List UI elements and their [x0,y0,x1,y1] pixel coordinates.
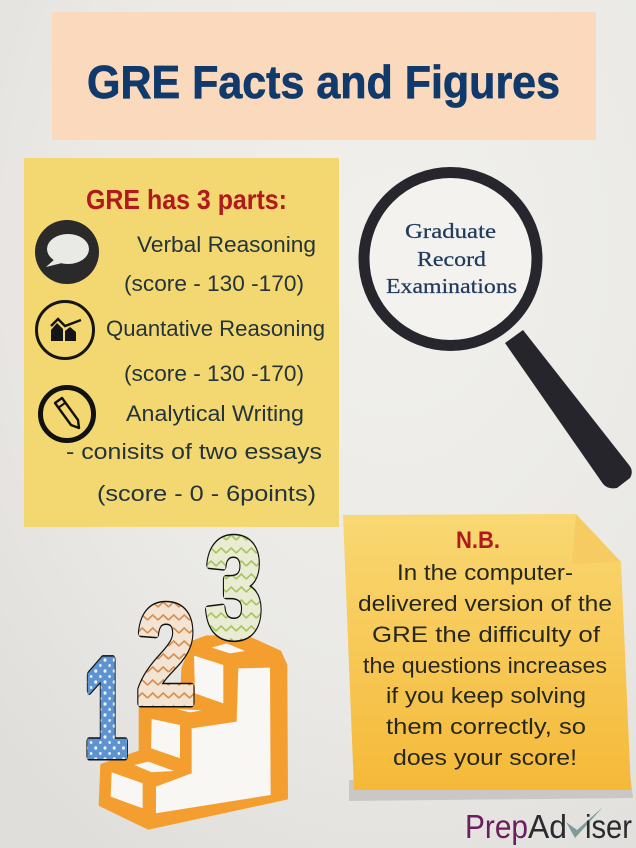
number 2: 2 [137,577,195,734]
illustration: stairs with numbers [84,510,287,828]
analytical writing label: Analytical Writing [126,401,304,426]
lens text: Record [417,247,487,271]
logo: PrepAdviser: Prep [465,808,528,845]
icon: chart [36,302,94,358]
note text: if you keep solving [386,683,586,708]
logo: PrepAdviser: Ad [528,808,567,845]
stairs [100,637,287,828]
lens [364,172,537,346]
icon: pencil [40,388,94,440]
panel: GRE has 3 parts [24,158,339,527]
lens text [386,219,517,298]
note text: GRE the difficulty of [372,622,601,647]
verbal reasoning label: Verbal Reasoning [137,232,316,257]
lens text: Examinations [386,274,517,298]
panel heading: GRE has 3 parts: [86,184,287,215]
note fold [572,514,621,564]
note text: delivered version of the [358,591,612,616]
sticky note [343,514,633,801]
handle [505,330,632,488]
note heading: N.B. [456,527,500,554]
title banner [52,12,596,140]
verbal reasoning score: (score - 130 -170) [124,271,304,296]
note body [343,514,631,790]
note text: In the computer- [397,560,573,585]
quantative reasoning score: (score - 130 -170) [124,361,304,386]
note text: the questions increases [363,653,607,678]
icon: speech bubble [35,220,99,284]
note text: does your score! [393,745,577,770]
number 1: 1 [84,630,128,787]
magnifying glass [364,172,632,488]
number 2: 2 [137,577,195,734]
analytical writing score: (score - 0 - 6points) [97,481,316,506]
number 3: 3 [206,510,262,666]
note text [358,560,612,770]
quantative reasoning label: Quantative Reasoning [106,316,325,341]
number 1: 1 [84,630,128,787]
essays note: - conisits of two essays [66,439,322,464]
note text: them correctly, so [386,714,586,739]
number 3: 3 [206,510,262,666]
note shadow [349,780,633,801]
title: GRE Facts and Figures [87,56,560,108]
logo checkmark [566,807,603,838]
logo: PrepAdviser [465,807,632,845]
lens text: Graduate [405,219,496,243]
